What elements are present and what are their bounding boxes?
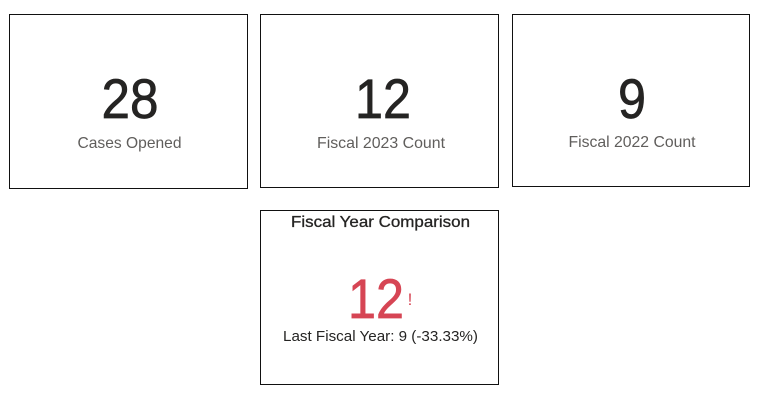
value: 12: 12 bbox=[355, 67, 411, 130]
panel: cases opened bbox=[10, 14, 248, 188]
heading: fiscal year comparison: Fiscal Year Comparison bbox=[291, 214, 470, 231]
value: 9: 9 bbox=[618, 67, 646, 130]
icon: exclamation mark: ! bbox=[408, 290, 412, 309]
panel: fiscal 2022 count bbox=[512, 14, 750, 186]
value: 12 in red: 12 bbox=[348, 267, 404, 330]
value: 28: 28 bbox=[102, 67, 158, 130]
label: last fiscal year: Last Fiscal Year: 9 (-33.33%) bbox=[283, 328, 478, 345]
label: cases opened: Cases Opened bbox=[78, 135, 182, 152]
label: fiscal 2022 count: Fiscal 2022 Count bbox=[568, 134, 696, 151]
panel: fiscal year comparison bbox=[260, 210, 498, 384]
label: fiscal 2023 count: Fiscal 2023 Count bbox=[317, 135, 446, 152]
panel: fiscal 2023 count bbox=[260, 14, 498, 188]
